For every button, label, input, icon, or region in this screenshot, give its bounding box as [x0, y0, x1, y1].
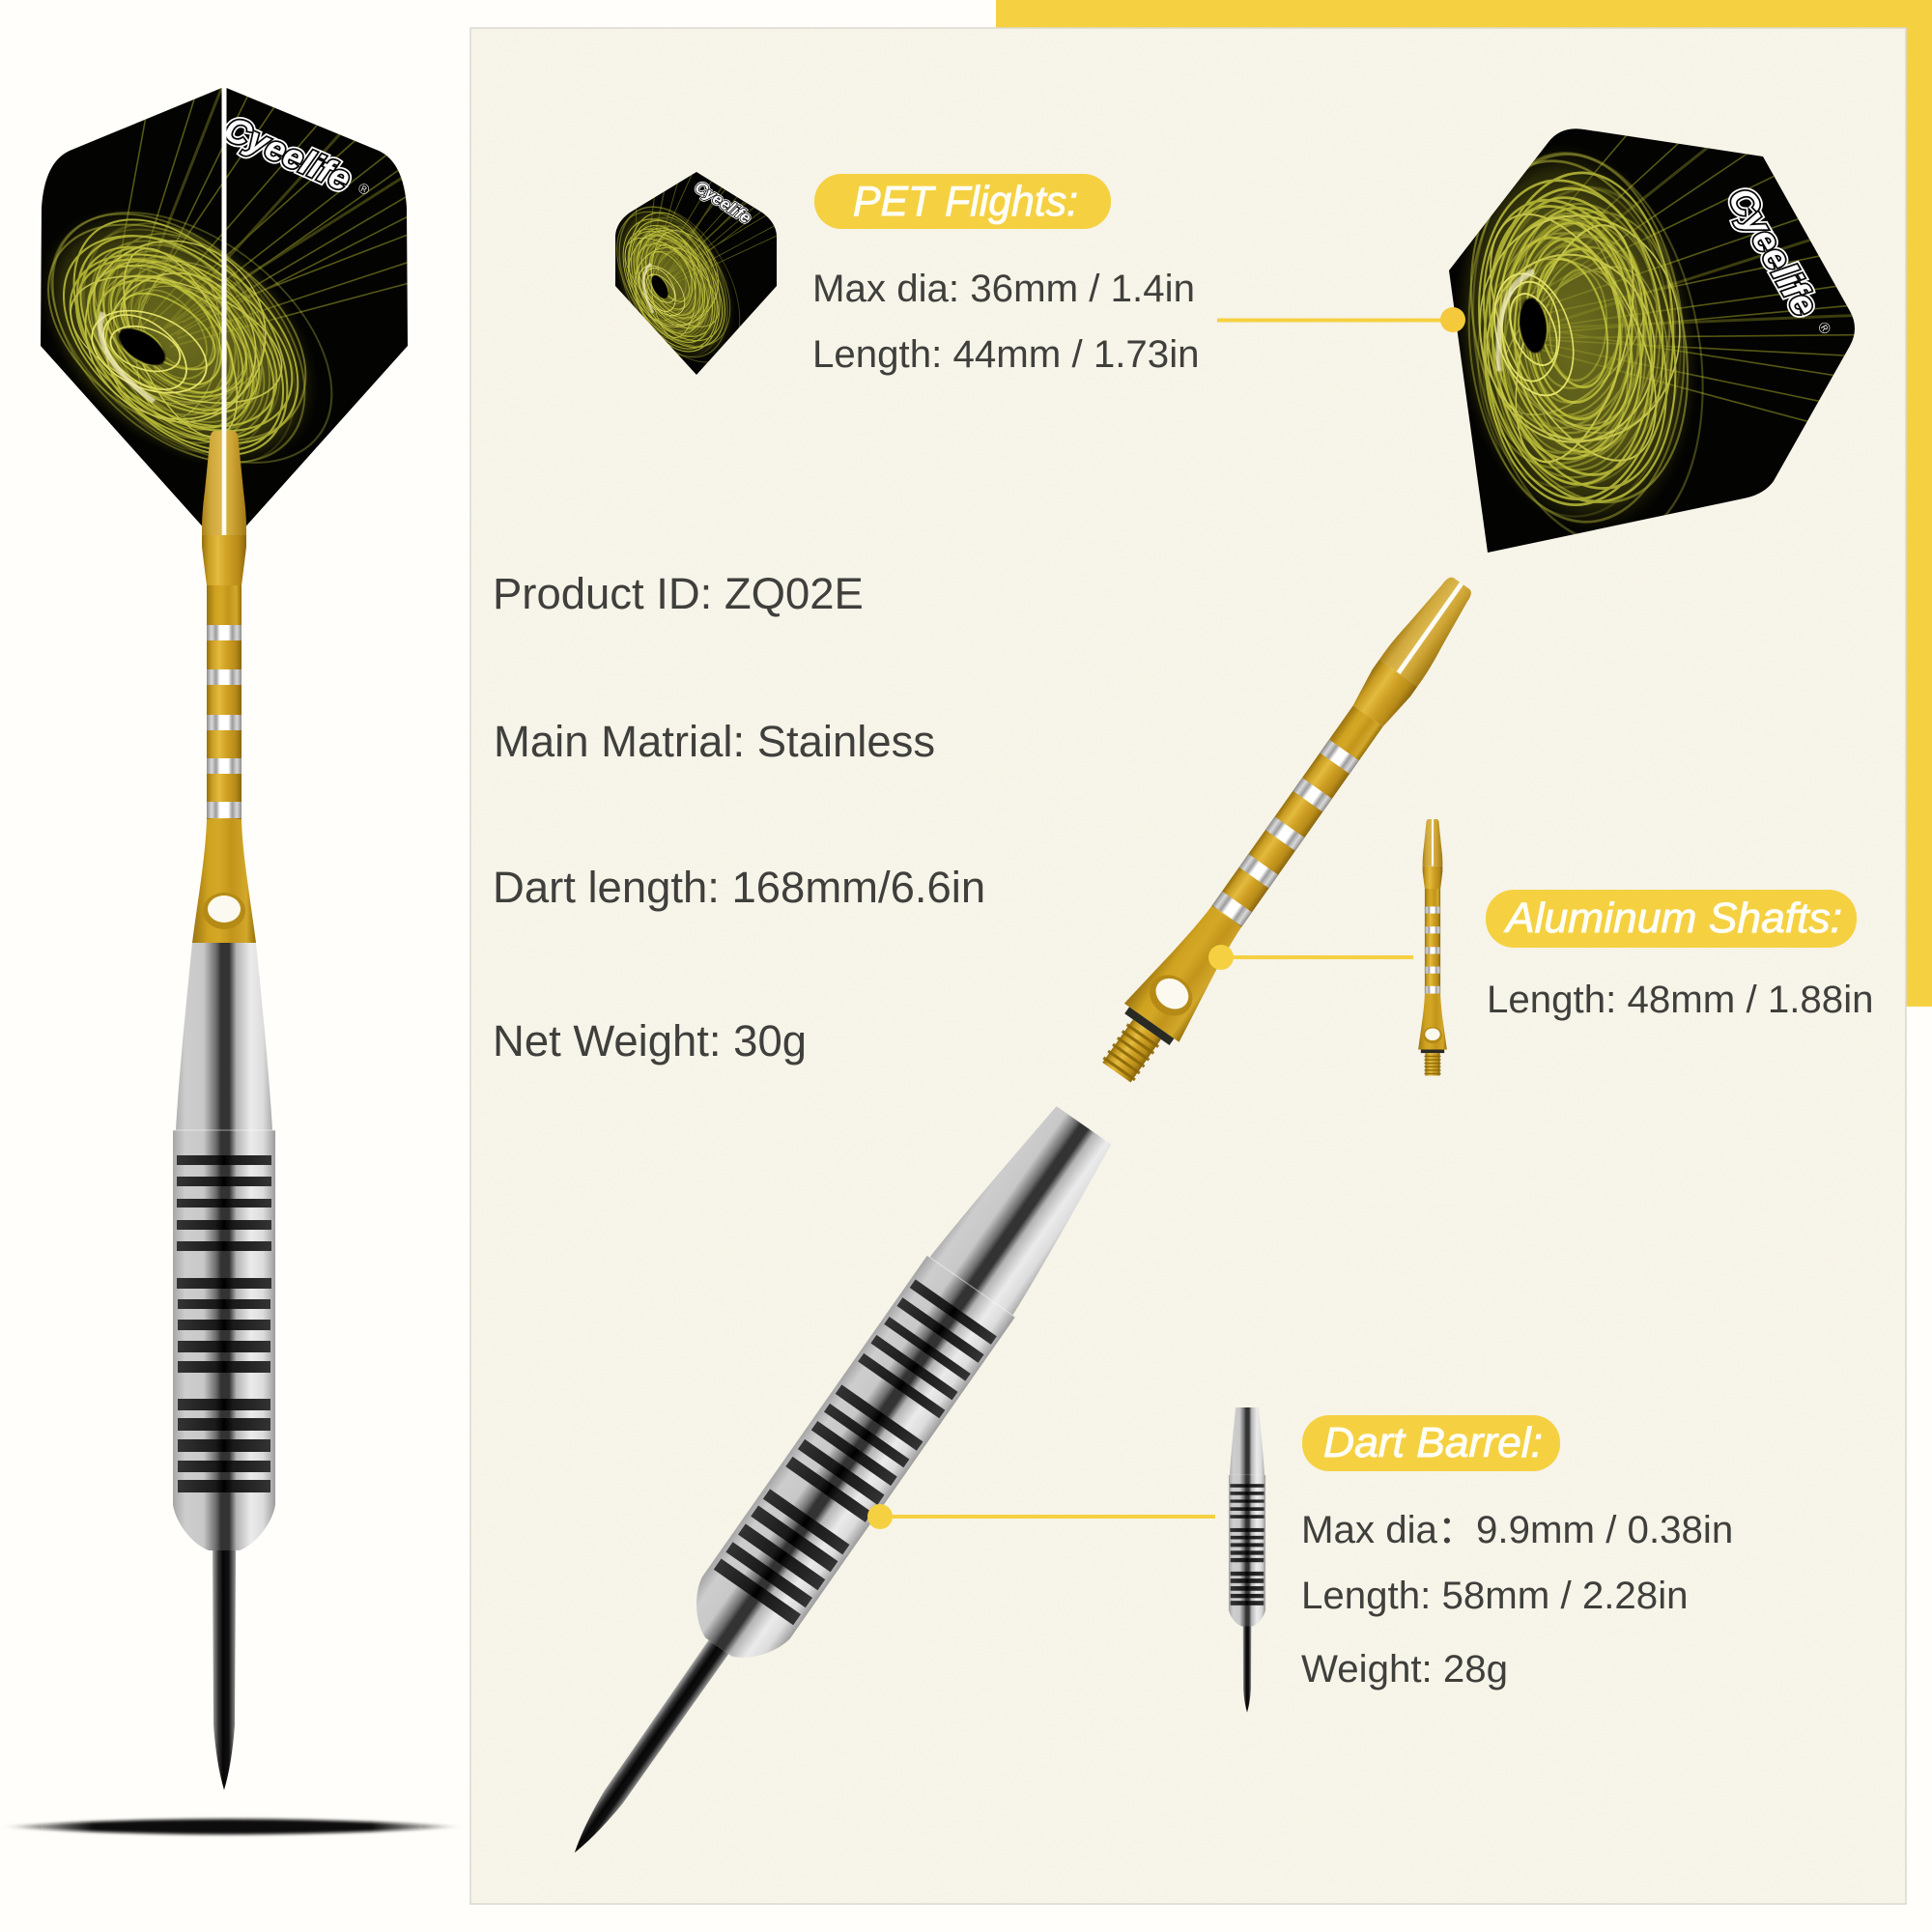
exploded dart barrel	[530, 1094, 1127, 1884]
large flight logo: Cyeelife	[1719, 181, 1825, 324]
yellow accent frame	[996, 0, 1932, 1007]
text: flight specifications: Length: 44mm / 1.73in	[812, 332, 1200, 376]
text: barrel specifications: Length: 58mm / 2.28in	[1301, 1574, 1689, 1617]
small dart barrel	[1229, 1407, 1265, 1713]
connector dot: flight	[1440, 307, 1465, 332]
specification list: Main Matrial: Stainless	[494, 717, 935, 766]
large tilted flight	[1449, 128, 1855, 553]
large flight logo: Cyeelife	[1719, 181, 1825, 324]
left dart flight	[41, 88, 408, 526]
text: barrel specifications: Weight: 28g	[1301, 1647, 1508, 1690]
small PET flight	[615, 172, 777, 375]
heading: aluminum shafts: Aluminum Shafts:	[1503, 895, 1842, 942]
small aluminum shaft	[1418, 819, 1447, 1076]
heading: dart barrel: Dart Barrel:	[1323, 1419, 1543, 1466]
left dart barrel and point	[173, 943, 275, 1790]
large flight logo: ®	[1814, 320, 1833, 338]
specification list	[493, 569, 985, 1065]
specification list: Net Weight: 30g	[493, 1016, 807, 1065]
flight logo: Cyeelife	[218, 108, 356, 199]
heading: PET flights: PET Flights:	[853, 178, 1078, 225]
flight logo: ®	[355, 180, 372, 199]
text: flight specifications	[812, 267, 1200, 376]
panel: specifications background	[470, 28, 1906, 1904]
text: flight specifications: Max dia: 36mm / 1.4in	[812, 267, 1195, 310]
text: barrel specifications: 9.9mm / 0.38in	[1476, 1508, 1733, 1551]
text: barrel specifications	[1301, 1508, 1733, 1690]
text: shaft length: Length: 48mm / 1.88in	[1487, 978, 1874, 1021]
small flight logo: Cyeelife	[692, 178, 754, 227]
flight logo: Cyeelife	[218, 108, 356, 199]
specification list: Dart length: 168mm/6.6in	[493, 863, 985, 912]
left dart shaft	[192, 431, 256, 1001]
flight logo: Cyeelife	[218, 108, 356, 199]
connector: barrel	[867, 1504, 1215, 1529]
left assembled dart	[10, 88, 454, 1837]
connector: shaft	[1208, 945, 1413, 970]
connector: flight	[1217, 319, 1441, 323]
small flight logo: Cyeelife	[692, 178, 754, 227]
dart ground shadow	[0, 1819, 464, 1834]
exploded aluminum shaft	[1090, 564, 1489, 1092]
heading: PET flights	[814, 174, 1111, 229]
text: barrel specifications: Max dia：	[1301, 1508, 1476, 1551]
small flight logo: Cyeelife	[692, 178, 754, 227]
specification list: Product ID: ZQ02E	[493, 569, 864, 618]
large flight logo: Cyeelife	[1719, 181, 1825, 324]
